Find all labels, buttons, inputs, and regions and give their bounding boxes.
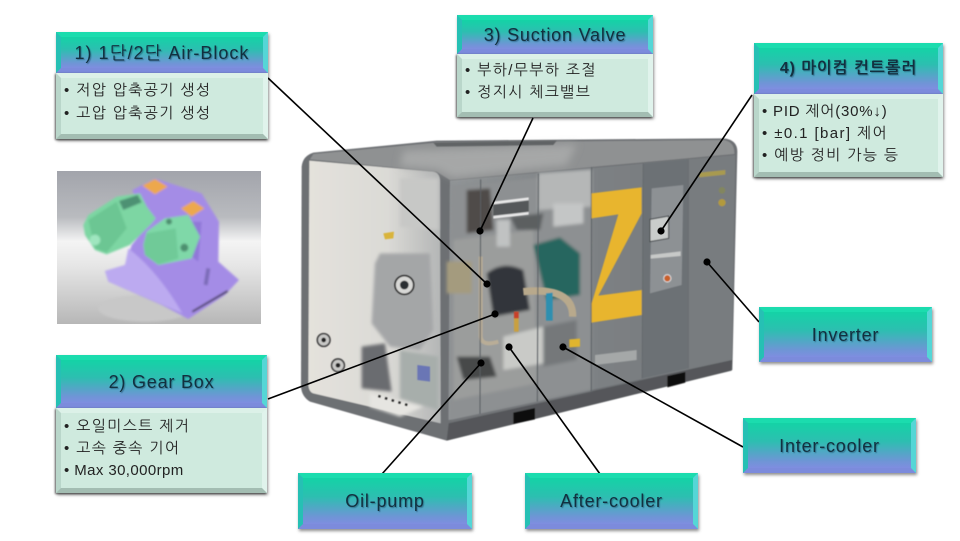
heading: Suction Valve: 3) Suction Valve <box>484 24 626 44</box>
leader line: 1단/2단 Air-Block <box>268 78 491 288</box>
base rail <box>447 360 732 441</box>
top panel <box>310 140 734 180</box>
purple gear housing <box>105 178 239 319</box>
blue filter and red valve <box>546 293 553 321</box>
heading: Gear Box <box>56 355 267 408</box>
control column <box>642 159 688 378</box>
brand strip <box>493 197 529 219</box>
panel: 2) Gear Box <box>54 355 270 497</box>
leader line: After-cooler <box>505 343 600 474</box>
text block: Air-Block details: • 저압 압축공기 생성 <box>64 82 211 99</box>
side ports <box>317 334 330 346</box>
label: Oil-pump: Oil-pump <box>345 491 425 511</box>
heading: Air-Block: 1) 1단/2단 Air-Block <box>75 42 249 62</box>
panel: 1) Air-Block <box>54 32 271 143</box>
label: Inverter <box>759 307 932 362</box>
text block: Suction Valve details: • 정지시 체크밸브 <box>465 84 591 101</box>
outer housing <box>301 138 737 441</box>
gear box and air block photo <box>57 171 261 324</box>
text block: Suction Valve details: • 부하/무부하 조절 <box>465 62 597 79</box>
text block: controller details: • 예방 정비 가능 등 <box>762 147 899 164</box>
leader line: 마이컴 컨트롤러 <box>657 95 752 235</box>
pressure vessel <box>372 253 433 350</box>
leader line: Suction Valve <box>476 118 533 235</box>
heading: Suction Valve <box>457 15 653 54</box>
small green block <box>143 215 200 265</box>
roof translucency <box>400 145 577 177</box>
heading: Air-Block <box>56 32 268 73</box>
panel seams <box>480 159 688 414</box>
text block: Gear Box details <box>56 408 267 493</box>
label: After-cooler: After-cooler <box>560 491 663 511</box>
label: Inter-cooler: Inter-cooler <box>779 436 880 456</box>
text block: Air-Block details: • 고압 압축공기 생성 <box>64 104 211 122</box>
heading: Gear Box: 2) Gear Box <box>109 372 214 392</box>
front face <box>449 155 735 420</box>
text block: controller details <box>754 94 943 177</box>
photo background <box>57 171 261 324</box>
text block: Air-Block details <box>56 73 268 139</box>
panel: 4) controller <box>752 43 946 181</box>
leader line: Gear Box <box>268 310 499 399</box>
text block: Gear Box details: • Max 30,000rpm <box>64 462 184 479</box>
orange plates <box>142 179 168 194</box>
label: Oil-pump <box>298 473 472 529</box>
text block: Gear Box details: • 고속 중속 기어 <box>64 440 180 457</box>
vessel flange <box>395 276 414 294</box>
label: Inter-cooler <box>743 418 916 473</box>
text block: controller details: • PID 제어(30%↓) <box>762 103 888 120</box>
heading: controller <box>754 43 943 94</box>
label: After-cooler <box>525 473 698 529</box>
leader line: Oil-pump <box>382 359 485 474</box>
interior <box>362 169 592 419</box>
heading: controller: 4) 마이컴 컨트롤러 <box>780 60 917 77</box>
text block: Suction Valve details <box>457 54 653 117</box>
text block: controller details: • ±0.1 [bar] 제어 <box>762 125 888 142</box>
leader line: Inverter <box>703 258 759 322</box>
text block: Gear Box details: • 오일미스트 제거 <box>64 418 190 435</box>
yellow Z <box>592 187 642 323</box>
left translucent side <box>308 161 441 423</box>
large green block <box>83 193 156 254</box>
machine body <box>301 138 737 441</box>
label: Inverter: Inverter <box>812 324 879 344</box>
leader line: Inter-cooler <box>559 343 743 447</box>
panel: 3) Suction Valve <box>454 15 656 121</box>
